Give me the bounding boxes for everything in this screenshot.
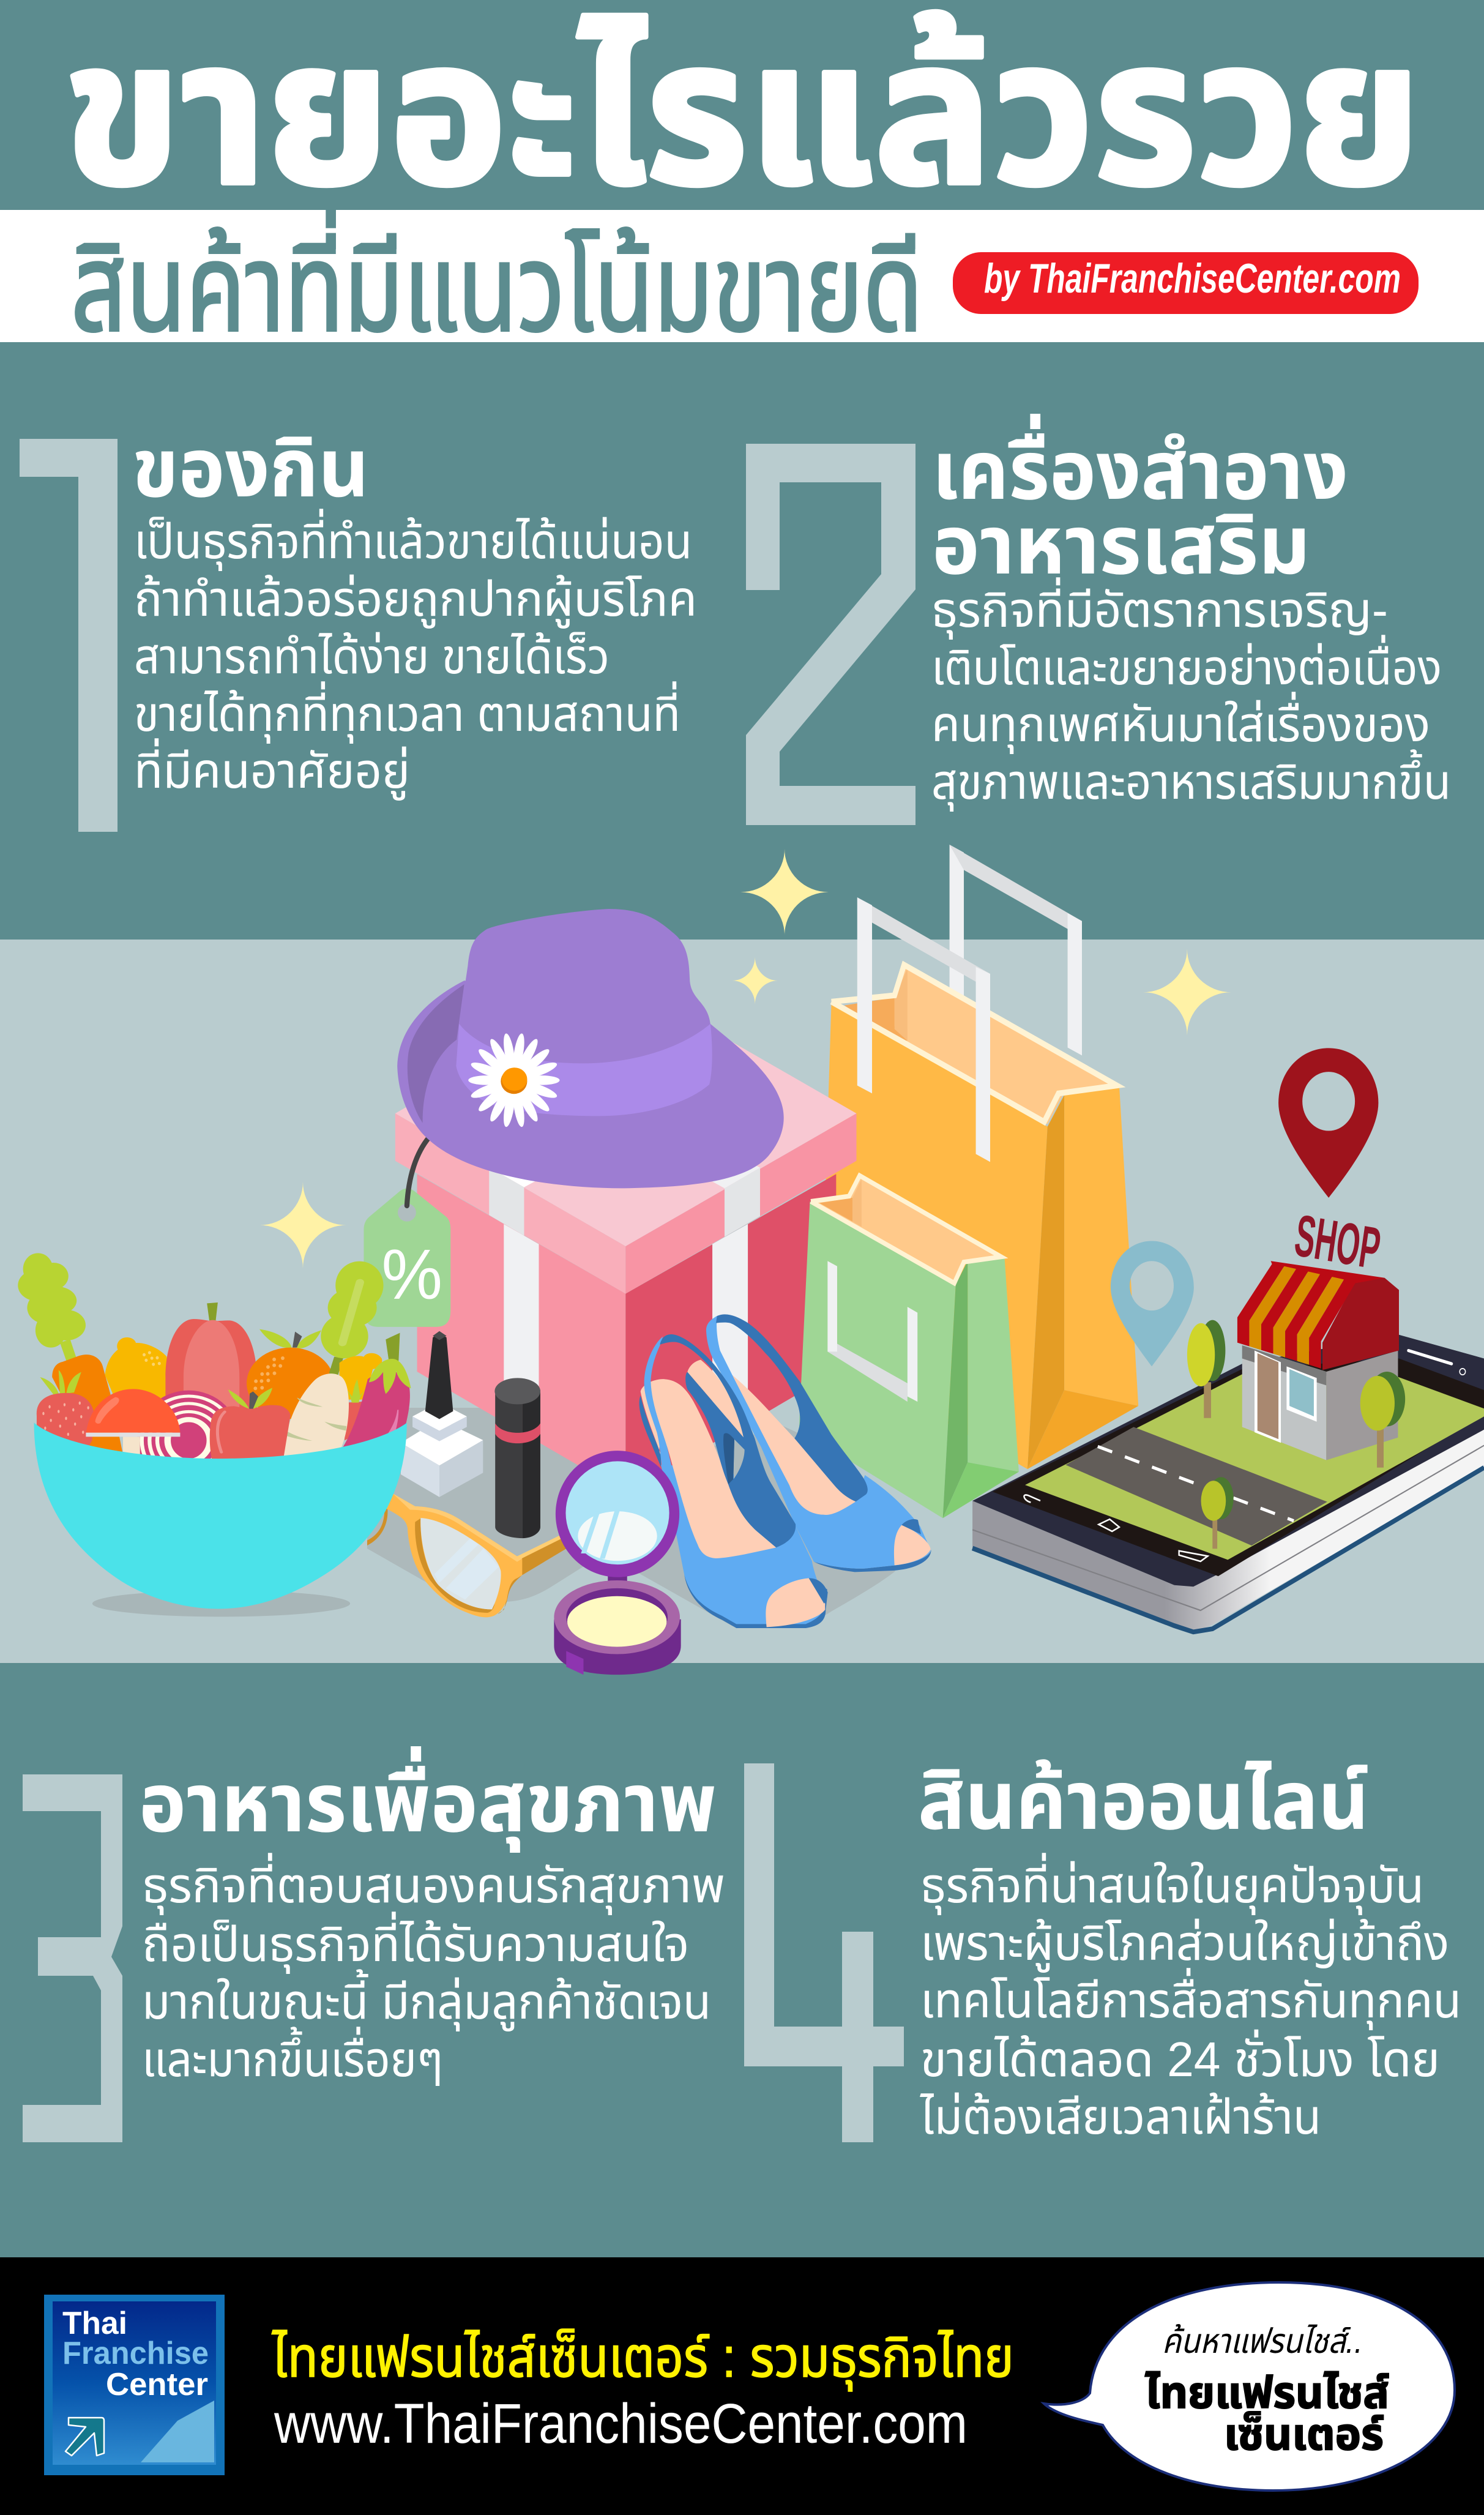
- body 4: [919, 1853, 1461, 2144]
- compact and sparkles: [259, 957, 778, 1675]
- orange: [247, 1329, 334, 1419]
- bowl shadow: [92, 1590, 350, 1616]
- panel: item 1: [20, 423, 697, 832]
- numeral 3: [23, 1774, 122, 2142]
- sparkle: [740, 849, 829, 935]
- left green sprig: [18, 1253, 86, 1361]
- body 1: ขายได้ทุกที่ทุกเวลา ตามสถานที่: [134, 681, 680, 744]
- footer yellow line: ไทยแฟรนไชส์เซ็นเตอร์ : รวมธุรกิจไทย: [271, 2326, 1014, 2391]
- price tag: %: [381, 1235, 442, 1315]
- illustration: sparkles, pins and phone: [740, 849, 1484, 1632]
- body 3: และมากขึ้นเรื่อยๆ: [142, 2027, 443, 2087]
- logo: [44, 2295, 225, 2475]
- heading 2: อาหารเสริม: [932, 500, 1310, 591]
- speech bubble: ไทยแฟรนไชส์: [1145, 2369, 1389, 2418]
- lipstick: [494, 1378, 540, 1538]
- body 3: มากในขณะนี้ มีกลุ่มลูกค้าชัดเจน: [142, 1969, 711, 2031]
- apple: [210, 1388, 291, 1460]
- body 4: เพราะผู้บริโภคส่วนใหญ่เข้าถึง: [920, 1916, 1449, 1973]
- illustration: gift box, tag and hat: [364, 909, 857, 1493]
- blue location pin: [1111, 1241, 1194, 1366]
- body 3: [142, 1853, 725, 2087]
- glasses: [367, 1493, 568, 1617]
- left shoe: [639, 1334, 828, 1628]
- heading 2: เครื่องสำอาง: [932, 414, 1348, 517]
- tree: [1201, 1477, 1234, 1549]
- heading 3: อาหารเพื่อสุขภาพ: [139, 1746, 717, 1853]
- panel: item 4: [744, 1755, 1461, 2144]
- heading 4: สินค้าออนไลน์: [918, 1755, 1369, 1847]
- numeral 4: [744, 1763, 904, 2142]
- speech bubble: [1044, 2282, 1455, 2491]
- numeral 1: [20, 439, 117, 832]
- mushroom: [86, 1389, 180, 1461]
- body 4: ไม่ต้องเสียเวลาเฝ้าร้าน: [919, 2090, 1321, 2144]
- red byline badge: [953, 252, 1419, 314]
- compact mirror: [554, 1451, 681, 1675]
- gift box: [395, 981, 857, 1493]
- body 1: [134, 509, 697, 801]
- heading 2: [932, 414, 1348, 591]
- sliced beet: [137, 1391, 240, 1490]
- logo: Franchise: [62, 2336, 209, 2371]
- carrot: [52, 1355, 123, 1455]
- body 1: ถ้าทำแล้วอร่อยถูกปากผู้บริโภค: [134, 572, 697, 629]
- body 2: เติบโตและขยายอย่างต่อเนื่อง: [931, 635, 1442, 695]
- subtitle band: [0, 207, 1484, 357]
- body 4: ขายได้ตลอด 24 ชั่วโมง โดย: [920, 2030, 1440, 2087]
- beauty items: [401, 1331, 540, 1538]
- illustration band: [0, 940, 1484, 1663]
- body 4: เทคโนโลยีการสื่อสารกันทุกคน: [920, 1968, 1461, 2030]
- red pepper: [165, 1302, 257, 1410]
- bowl and shadow: [34, 1423, 407, 1616]
- nail polish: [401, 1331, 483, 1497]
- body 2: ธุรกิจที่มีอัตราการเจริญ-: [931, 577, 1388, 640]
- body 2: [931, 577, 1451, 812]
- tree: [1360, 1372, 1405, 1468]
- price tag: [364, 1137, 450, 1327]
- daisy: [468, 1033, 559, 1128]
- sparkle: [732, 957, 778, 1004]
- teal bowl: [34, 1423, 407, 1609]
- illustration: yellow shopping bag: [821, 845, 1138, 1469]
- body 1: เป็นธุรกิจที่ทำแล้วขายได้แน่นอน: [134, 509, 692, 571]
- logo: Thai: [62, 2306, 127, 2341]
- main title: ขายอะไรแล้วรวย: [64, 0, 1421, 226]
- strawberry: [37, 1370, 95, 1449]
- lemon: [105, 1337, 167, 1400]
- body 2: คนทุกเพศหันมาใส่เรื่องของ: [931, 692, 1430, 754]
- subtitle: สินค้าที่มีแนวโน้มขายดี: [71, 207, 923, 357]
- red location pin: [1278, 1048, 1378, 1198]
- blue high-heeled shoes: [638, 1314, 931, 1628]
- green shopping bag: [799, 1174, 1019, 1518]
- root vegetable: [283, 1373, 349, 1459]
- tree: [1187, 1320, 1225, 1418]
- right shoe: [706, 1314, 931, 1572]
- body 3: ถือเป็นธุรกิจที่ได้รับความสนใจ: [142, 1911, 689, 1974]
- shop sign: SHOP: [1291, 1202, 1384, 1282]
- body 1: สามารถทำได้ง่าย ขายได้เร็ว: [134, 629, 610, 684]
- panel: item 3: [23, 1746, 725, 2142]
- purple hat: [397, 909, 784, 1188]
- smartphone: [972, 1335, 1484, 1632]
- heading 1: ของกิน: [132, 423, 369, 514]
- shop building: [1237, 1261, 1399, 1460]
- logo: Center: [106, 2367, 208, 2402]
- fruit and vegetables: [18, 1253, 411, 1490]
- speech bubble: เซ็นเตอร์: [1224, 2410, 1384, 2459]
- small lemon: [340, 1353, 382, 1400]
- body 4: ธุรกิจที่น่าสนใจในยุคปัจจุบัน: [920, 1853, 1424, 1915]
- shoe shadow: [638, 1426, 895, 1626]
- numeral 2: [746, 444, 915, 825]
- floor shadow: [367, 1408, 636, 1602]
- sparkle: [259, 1182, 346, 1268]
- speech bubble: ค้นหาแฟรนไชส์..: [1162, 2322, 1363, 2360]
- footer band: [0, 2257, 1484, 2515]
- body 3: ธุรกิจที่ตอบสนองคนรักสุขภาพ: [142, 1853, 725, 1915]
- right green sprig: [321, 1261, 384, 1377]
- sparkle: [1143, 949, 1231, 1036]
- body 1: ที่มีคนอาศัยอยู่: [134, 738, 410, 801]
- tomato: [345, 1379, 365, 1440]
- panel: item 2: [746, 414, 1451, 825]
- footer url: www.ThaiFranchiseCenter.com: [274, 2393, 968, 2455]
- eggplant: [340, 1333, 411, 1452]
- body 2: สุขภาพและอาหารเสริมมากขึ้น: [931, 749, 1451, 812]
